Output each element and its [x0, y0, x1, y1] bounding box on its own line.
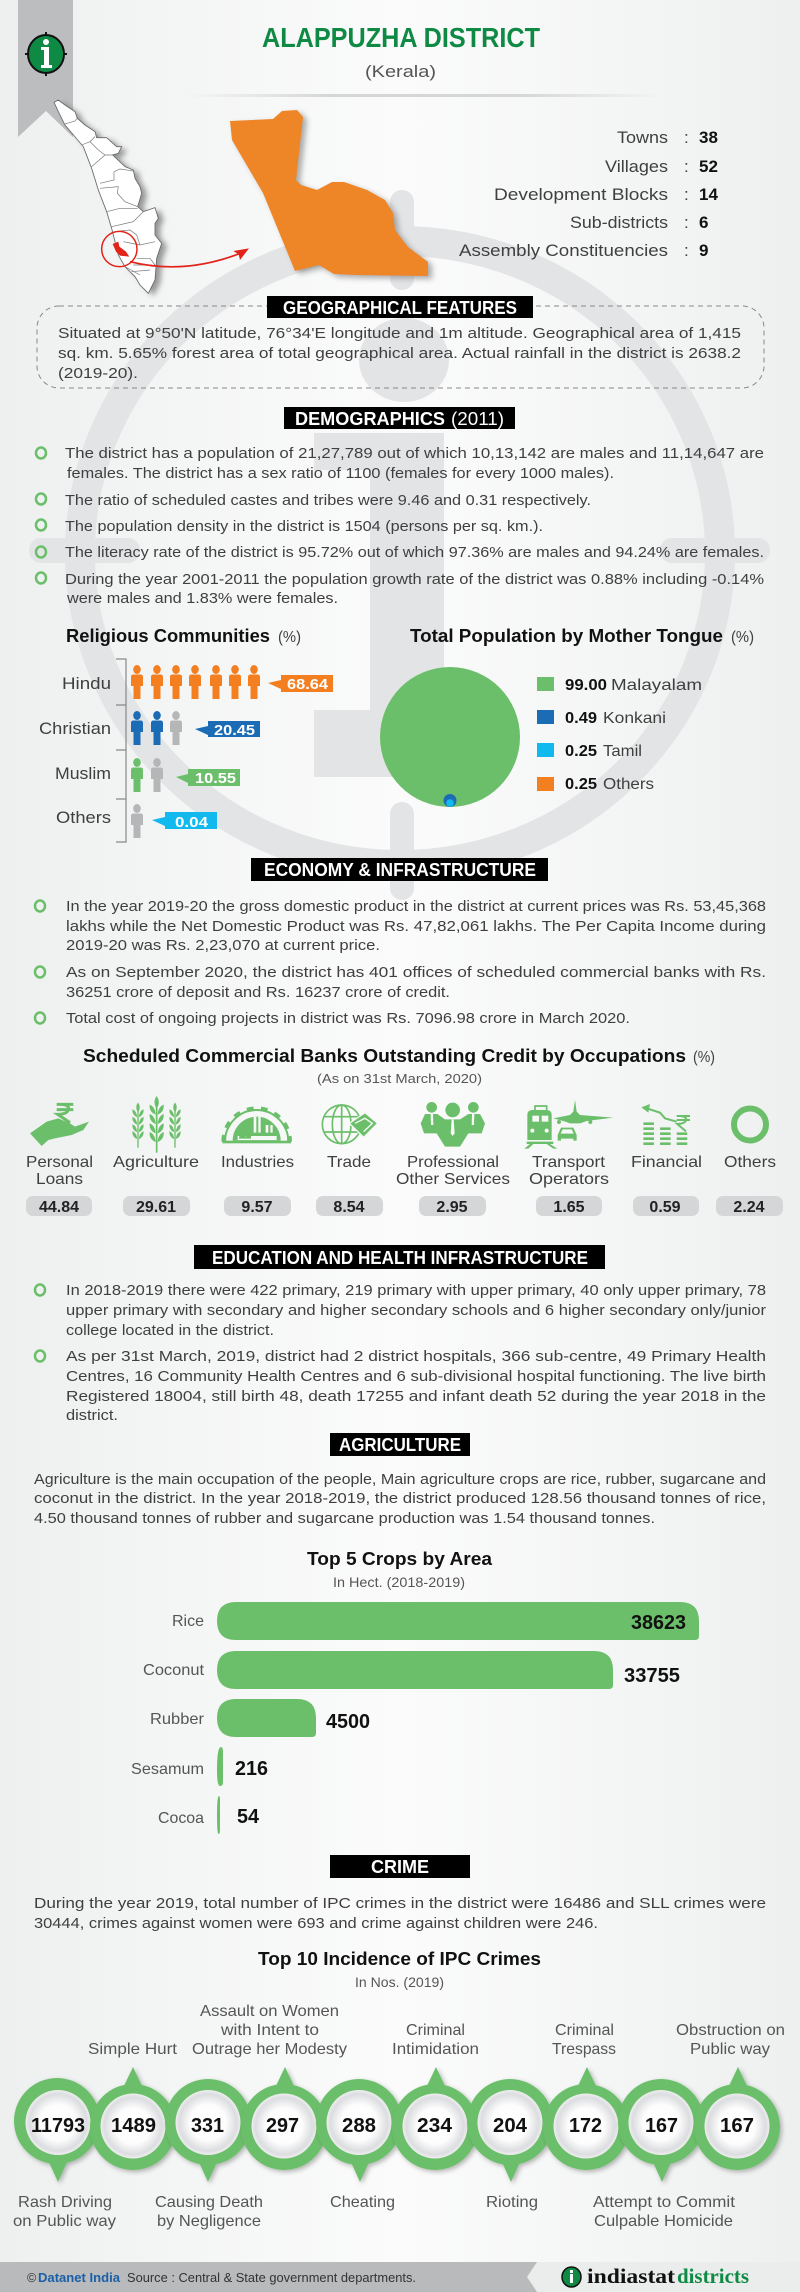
chart: top 10 crimes: 167 — [720, 2115, 754, 2137]
crime labels: with Intent to — [220, 2022, 319, 2039]
occupation labels: Other Services — [396, 1171, 510, 1188]
occupation labels: Agriculture — [113, 1154, 199, 1171]
occupation values: 2.24 — [733, 1199, 765, 1216]
footer: Source : Central & State government departments. — [127, 2270, 416, 2285]
heading: religious communities: (%) — [278, 629, 301, 646]
economy bullets: In the year 2019-20 the gross domestic product in the district at current prices was Rs. 53,45,368 — [66, 898, 766, 915]
icon: professional services — [421, 1102, 485, 1147]
occupation labels: Industries — [221, 1154, 294, 1171]
logo: indiastat districts: districts — [677, 2264, 749, 2288]
key statistics: : — [684, 157, 689, 176]
crime labels: Simple Hurt — [88, 2041, 178, 2058]
heading: top 10 crimes: In Nos. (2019) — [355, 1974, 444, 1990]
key statistics: : — [684, 213, 689, 232]
chart: top 10 crimes: 11793 — [31, 2115, 85, 2137]
education bullets: As per 31st March, 2019, district had 2 district hospitals, 366 sub-centre, 49 Primary Health — [66, 1348, 766, 1365]
key statistics: : — [684, 128, 689, 147]
chart: top 10 crimes: 331 — [191, 2115, 224, 2137]
chart: top 10 crimes: 1489 — [111, 2115, 156, 2137]
chart: religious communities pictogram — [39, 659, 333, 842]
occupation values — [26, 1196, 783, 1216]
crime labels: Trespass — [552, 2041, 616, 2058]
chart: top 10 crimes: 234 — [417, 2115, 453, 2137]
heading: top 5 crops: In Hect. (2018-2019) — [333, 1574, 465, 1590]
icon: transport operators — [524, 1100, 613, 1149]
demographics bullets: The ratio of scheduled castes and tribes were 9.46 and 0.31 respectively. — [65, 492, 591, 509]
demographics bullets: During the year 2001-2011 the population growth rate of the district was 0.88% including -0.14% — [65, 571, 764, 588]
heading: bank credit by occupations — [83, 1046, 715, 1086]
occupation values: 0.59 — [649, 1199, 681, 1216]
occupation labels: Financial — [631, 1154, 702, 1171]
crime labels: Assault on Women — [200, 2003, 339, 2020]
education bullets: Centres, 16 Community Health Centres and 6 sub-divisional hospital functioning. The live birth — [66, 1368, 766, 1385]
icon: financial — [641, 1104, 690, 1145]
chart: religious communities pictogram: 0.04 — [175, 814, 209, 831]
chart: top 5 crops: Coconut — [143, 1662, 205, 1679]
demographics bullets: females. The district has a sex ratio of 1100 (females for every 1000 males). — [67, 465, 614, 482]
footer — [0, 2262, 800, 2292]
economy bullets: As on September 2020, the district has 401 offices of scheduled commercial banks with Rs. — [66, 964, 766, 981]
chart: mother tongue pie — [380, 667, 520, 807]
crime labels: Causing Death — [155, 2194, 263, 2211]
key statistics: : — [684, 185, 689, 204]
crime labels: Attempt to Commit — [593, 2194, 736, 2211]
chart: religious communities pictogram: Others — [56, 808, 111, 827]
chart: religious communities pictogram: 20.45 — [214, 722, 255, 739]
arrow: to district map — [130, 248, 249, 267]
title: ALAPPUZHA DISTRICT — [262, 22, 540, 53]
occupation labels: Transport — [532, 1154, 606, 1171]
key statistics: 14 — [699, 185, 718, 204]
panel: geographical features: Situated at 9°50'N latitude, 76°34'E longitude and 1m altitude. Geographical area of 1,415 — [58, 325, 741, 342]
chart: religious communities pictogram: Muslim — [55, 764, 111, 783]
chart: top 10 crimes: 204 — [493, 2115, 528, 2137]
heading: mother tongue: (%) — [731, 629, 754, 646]
demographics bullets: were males and 1.83% were females. — [66, 590, 338, 607]
key statistics: Sub-districts — [570, 213, 668, 232]
legend: mother tongue: 0.25 — [565, 776, 597, 793]
economy bullets: 36251 crore of deposit and Rs. 16237 crore of credit. — [66, 984, 450, 1001]
key statistics: Assembly Constituencies — [459, 241, 668, 260]
heading: demographics: (2011) — [451, 409, 504, 429]
chart: top 5 crops: Rice — [172, 1613, 204, 1630]
text: agriculture — [34, 1471, 766, 1527]
demographics bullets: The district has a population of 21,27,789 out of which 10,13,142 are males and 11,14,647 are — [65, 445, 764, 462]
key statistics: : — [684, 241, 689, 260]
chart: religious communities pictogram: 68.64 — [287, 676, 329, 693]
legend: mother tongue: Others — [603, 776, 654, 793]
chart: top 10 crimes: 172 — [569, 2115, 602, 2137]
key statistics: 38 — [699, 128, 718, 147]
key statistics: 9 — [699, 241, 708, 260]
icon: industries — [222, 1109, 291, 1143]
logo: indiastat districts — [562, 2264, 749, 2288]
heading: bank credit by occupations: (%) — [693, 1049, 715, 1066]
legend: mother tongue — [537, 677, 702, 793]
chart: top 10 crimes: 297 — [266, 2115, 299, 2137]
heading: education and health: EDUCATION AND HEALTH INFRASTRUCTURE — [212, 1248, 588, 1268]
crime labels: by Negligence — [157, 2213, 261, 2230]
chart: religious communities pictogram: Christian — [39, 719, 111, 738]
text: crime: During the year 2019, total number of IPC crimes in the district were 16486 and SLL crimes were — [34, 1895, 766, 1912]
crime labels — [13, 2003, 785, 2230]
chart: religious communities pictogram: Hindu — [62, 674, 111, 693]
legend: mother tongue: 0.49 — [565, 710, 597, 727]
heading: top 10 crimes — [258, 1949, 541, 1990]
occupation values: 2.95 — [436, 1199, 468, 1216]
chart: top 10 crimes: 167 — [645, 2115, 678, 2137]
heading: geographical features: GEOGRAPHICAL FEATURES — [283, 298, 517, 318]
crime labels: Criminal — [406, 2022, 465, 2039]
crime labels: Obstruction on — [676, 2022, 785, 2039]
heading: demographics — [284, 407, 515, 429]
panel: geographical features — [37, 306, 764, 388]
occupation values: 44.84 — [39, 1199, 79, 1216]
occupation labels: Trade — [327, 1154, 371, 1171]
occupation labels: Professional — [407, 1154, 499, 1171]
heading: top 5 crops — [307, 1549, 493, 1590]
key statistics: 6 — [699, 213, 708, 232]
key statistics: Towns — [617, 128, 668, 147]
chart: top 5 crops: 216 — [235, 1758, 268, 1780]
icon: info bookmark — [18, 0, 73, 137]
key statistics: 52 — [699, 157, 718, 176]
occupation labels: Others — [724, 1154, 776, 1171]
occupation values: 9.57 — [241, 1199, 273, 1216]
legend: mother tongue: Tamil — [603, 743, 642, 760]
subtitle: (Kerala) — [365, 62, 436, 81]
crime labels: Culpable Homicide — [594, 2213, 733, 2230]
occupation values: 29.61 — [136, 1199, 176, 1216]
icon: agriculture — [132, 1096, 181, 1153]
education bullets: Registered 18004, still birth 48, death 17255 and infant death 52 during the year 2018 in the — [66, 1388, 766, 1405]
economy bullets: lakhs while the Net Domestic Product was Rs. 47,82,061 lakhs. The Per Capita Income during — [66, 918, 766, 935]
text: crime: 30444, crimes against women were 693 and crime against children were 246. — [34, 1915, 598, 1932]
heading: bank credit by occupations: (As on 31st March, 2020) — [317, 1071, 482, 1086]
chart: top 5 crops: 54 — [237, 1806, 260, 1828]
crime labels: Criminal — [555, 2022, 614, 2039]
heading: bank credit by occupations: Scheduled Commercial Banks Outstanding Credit by Occupations — [83, 1046, 686, 1066]
economy bullets: Total cost of ongoing projects in district was Rs. 7096.98 crore in March 2020. — [66, 1010, 630, 1027]
text: agriculture: coconut in the district. In the year 2018-2019, the district produced 128.56 thousand tonnes of rice, — [34, 1490, 766, 1507]
crime labels: Outrage her Modesty — [192, 2041, 347, 2058]
chart: top 5 crops: 38623 — [631, 1612, 686, 1634]
occupation values: 1.65 — [553, 1199, 585, 1216]
education bullets: district. — [66, 1407, 118, 1424]
chart: top 5 crops: 33755 — [624, 1665, 680, 1687]
crime labels: Intimidation — [392, 2041, 479, 2058]
footer: © — [27, 2271, 37, 2285]
chart: top 5 crops: Cocoa — [158, 1810, 204, 1827]
panel: geographical features: sq. km. 5.65% forest area of total geographical area. Actual rainfall in the district is 2638.2 — [58, 345, 741, 362]
demographics bullets: The population density in the district is 1504 (persons per sq. km.). — [65, 518, 543, 535]
logo: indiastat districts: indiastat — [587, 2264, 675, 2288]
heading: economy and infrastructure: ECONOMY & INFRASTRUCTURE — [264, 860, 536, 880]
economy bullets: 2019-20 was Rs. 2,23,070 at current price. — [66, 937, 380, 954]
legend: mother tongue: 0.25 — [565, 743, 597, 760]
crime labels: Rioting — [486, 2194, 538, 2211]
demographics bullets: The literacy rate of the district is 95.72% out of which 97.36% are males and 94.24% are females. — [65, 544, 764, 561]
heading: agriculture: AGRICULTURE — [339, 1435, 461, 1455]
education bullets — [35, 1282, 766, 1424]
heading: religious communities: Religious Communities — [66, 626, 270, 646]
occupation labels: Personal — [26, 1154, 93, 1171]
key statistics — [459, 128, 718, 260]
crime labels: on Public way — [13, 2213, 116, 2230]
chart: top 5 crops: Rubber — [150, 1711, 205, 1728]
heading: top 10 crimes: Top 10 Incidence of IPC Crimes — [258, 1949, 541, 1969]
legend: mother tongue: Malayalam — [611, 677, 702, 694]
icon: trade — [322, 1105, 378, 1144]
economy bullets — [35, 898, 766, 1027]
chart: top 5 crops — [131, 1602, 699, 1834]
occupation labels: Operators — [529, 1171, 609, 1188]
education bullets: In 2018-2019 there were 422 primary, 219 primary with upper primary, 40 only upper primary, 78 — [66, 1282, 766, 1299]
heading: crime: CRIME — [371, 1857, 429, 1877]
map: Alappuzha district — [230, 110, 432, 279]
occupation labels: Loans — [36, 1171, 83, 1188]
crime labels: Rash Driving — [18, 2194, 112, 2211]
chart: top 5 crops: 4500 — [326, 1711, 370, 1733]
legend: mother tongue: 99.00 — [565, 677, 607, 694]
icon: personal loans — [30, 1104, 89, 1146]
education bullets: upper primary with secondary and higher secondary schools and 6 higher secondary only/junior — [66, 1302, 766, 1319]
key statistics: Development Blocks — [494, 185, 668, 204]
chart: top 10 crimes — [14, 2067, 780, 2182]
watermark: info emblem — [29, 190, 770, 900]
heading: demographics: DEMOGRAPHICS — [295, 409, 445, 429]
chart: religious communities pictogram: 10.55 — [195, 770, 236, 787]
heading: top 5 crops: Top 5 Crops by Area — [307, 1549, 493, 1569]
footer: Datanet India — [38, 2270, 121, 2285]
occupation values: 8.54 — [333, 1199, 365, 1216]
education bullets: college located in the district. — [66, 1322, 274, 1339]
icon: others — [734, 1108, 766, 1140]
occupation labels — [26, 1154, 776, 1188]
heading: crime — [330, 1855, 470, 1878]
legend: mother tongue: Konkani — [603, 710, 666, 727]
text: agriculture: 4.50 thousand tonnes of rubber and sugarcane production was 1.54 thousand tonnes. — [34, 1510, 655, 1527]
key statistics: Villages — [605, 157, 668, 176]
map: Kerala with highlighted district — [54, 100, 167, 296]
panel: geographical features: (2019-20). — [58, 365, 138, 382]
crime labels: Cheating — [330, 2194, 395, 2211]
text: agriculture: Agriculture is the main occupation of the people, Main agriculture crops are rice, rubber, sugarcane and — [34, 1471, 766, 1488]
heading: mother tongue: Total Population by Mother Tongue — [410, 626, 723, 646]
chart: top 5 crops: Sesamum — [131, 1761, 204, 1778]
text: crime — [34, 1895, 766, 1932]
demographics bullets — [36, 445, 764, 607]
crime labels: Public way — [690, 2041, 770, 2058]
chart: top 10 crimes: 288 — [342, 2115, 376, 2137]
